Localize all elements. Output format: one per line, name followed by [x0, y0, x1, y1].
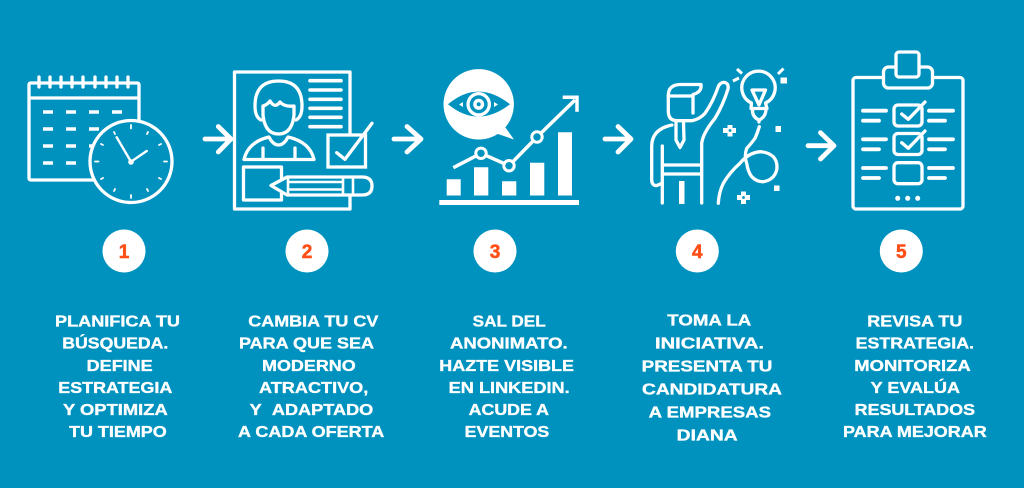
text: step 1: Y OPTIMIZA: [63, 402, 168, 419]
text: step 3: EVENTOS: [465, 424, 550, 441]
text: step 3: [439, 314, 574, 441]
text: step 2: A CADA OFERTA: [238, 424, 385, 441]
text: step 1: [55, 314, 180, 441]
number badge 5: 5: [896, 242, 907, 263]
text: step 1: ESTRATEGIA: [58, 380, 173, 397]
number badge 3: [474, 230, 516, 272]
icon: checklist clipboard: [853, 52, 963, 209]
number badge 3: 3: [490, 242, 500, 263]
number badge 4: 4: [692, 242, 703, 263]
text: step 1: TU TIEMPO: [69, 424, 167, 441]
text: step 5: [843, 314, 987, 441]
arrow: step 2 to 3: [394, 126, 421, 152]
text: step 2: CAMBIA TU CV: [248, 314, 379, 330]
text: step 4: PRESENTA TU: [642, 358, 772, 376]
text: step 1: BÚSQUEDA.: [62, 334, 168, 352]
text: step 5: RESULTADOS: [855, 402, 975, 419]
text: step 4: A EMPRESAS: [649, 404, 771, 422]
icon: person reaching for idea: [652, 68, 787, 204]
arrow: step 1 to 2: [205, 126, 231, 152]
text: step 4: INICIATIVA.: [655, 336, 764, 352]
text: step 2: Y ADAPTADO: [250, 402, 373, 419]
text: step 1: PLANIFICA TU: [55, 314, 180, 330]
arrow: step 3 to 4: [605, 126, 631, 152]
text: step 2: ATRACTIVO,: [259, 380, 368, 397]
text: step 5: ESTRATEGIA.: [856, 336, 974, 352]
text: step 1: DEFINE: [87, 358, 153, 375]
text: step 4: DIANA: [677, 428, 738, 444]
text: step 5: MONITORIZA: [854, 358, 971, 375]
number badge 2: 2: [302, 242, 312, 263]
text: step 5: REVISA TU: [867, 314, 962, 330]
icon: calendar and clock: [29, 77, 172, 202]
text: step 2: MODERNO: [262, 358, 356, 375]
text: step 3: EN LINKEDIN.: [449, 380, 570, 397]
number badge 1: [102, 230, 146, 272]
number badge 4: [676, 230, 719, 272]
arrow: step 4 to 5: [808, 133, 834, 159]
text: step 5: Y EVALÚA: [871, 378, 961, 397]
icon: eye and growth chart: [439, 69, 579, 205]
icon: CV with portrait: [234, 72, 372, 209]
text: step 3: ACUDE A: [469, 402, 549, 419]
text: step 2: PARA QUE SEA: [239, 336, 375, 352]
text: step 5: PARA MEJORAR: [843, 424, 987, 441]
text: step 4: CANDIDATURA: [642, 382, 783, 398]
text: step 3: ANONIMATO.: [450, 336, 568, 352]
text: step 4: [642, 312, 783, 444]
text: step 2: [238, 314, 385, 441]
text: step 3: SAL DEL: [473, 314, 546, 330]
number badge 2: [286, 230, 328, 272]
number badge 1: 1: [119, 242, 130, 263]
text: step 4: TOMA LA: [667, 312, 752, 330]
number badge 5: [880, 230, 923, 272]
text: step 3: HAZTE VISIBLE: [439, 358, 574, 375]
